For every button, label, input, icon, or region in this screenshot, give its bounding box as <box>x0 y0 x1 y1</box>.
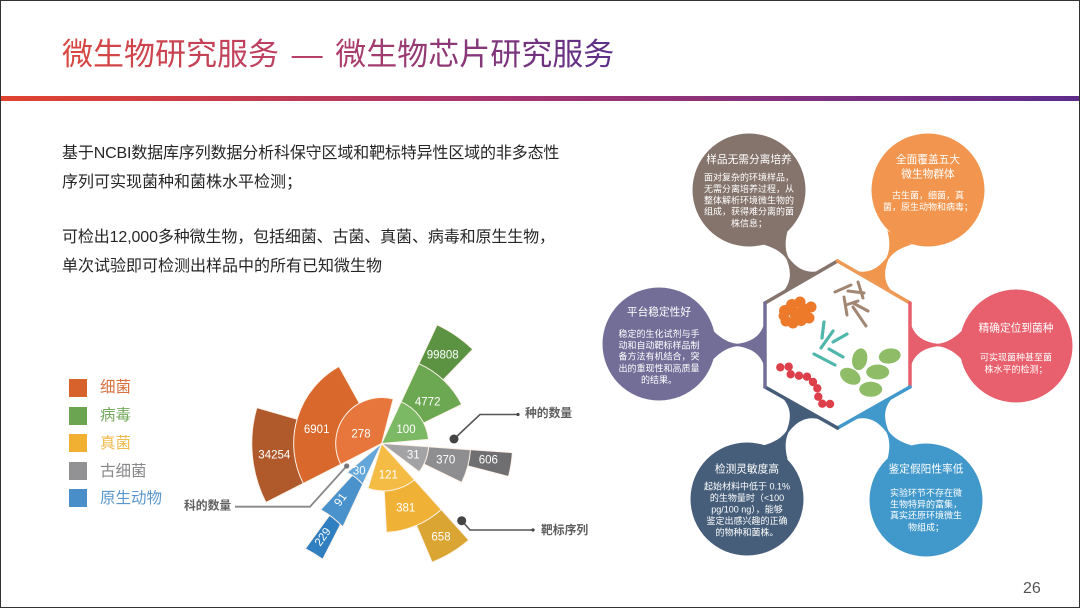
sector group: virus <box>382 325 473 444</box>
bubble: sensitivity: pg/100 ng），能够 <box>711 503 783 514</box>
chart values: 121 <box>379 470 398 482</box>
chart values <box>258 350 498 549</box>
chart values: 370 <box>436 455 455 467</box>
callout: target sequences: 靶标序列 <box>541 523 588 537</box>
chart values: 4772 <box>415 396 440 408</box>
bubble: no culture needed: 整体解析环境微生物的 <box>704 194 794 205</box>
bubble: sensitivity: 的生物量时（<100 <box>710 492 784 503</box>
callout: target sequences <box>457 516 588 537</box>
chart values: 606 <box>479 455 498 467</box>
callout: species count <box>450 406 572 444</box>
chart values: 91 <box>332 491 350 509</box>
bubble: platform stability: 的结果。 <box>641 374 677 385</box>
bubble: low false positives: 实验环节不存在微 <box>890 487 962 498</box>
text block: intro paragraph: 可检出12,000多种微生物，包括细菌、古菌、真菌、病毒和原生生物， <box>62 229 555 246</box>
chart values: 381 <box>396 502 415 514</box>
polar chart <box>252 325 512 562</box>
callout: family count <box>184 463 349 513</box>
bubble: platform stability: 动和自动靶标样品制 <box>618 339 700 350</box>
chart values: 99808 <box>427 350 459 362</box>
bubble: five microbial groups: 古生菌，细菌，真 <box>892 190 964 201</box>
chart values: 229 <box>313 526 334 549</box>
callout: species count: 种的数量 <box>525 406 572 420</box>
bubble: platform stability: 出的重现性和高质量 <box>618 363 700 374</box>
sector group: fungi <box>368 444 469 562</box>
chart values: 278 <box>351 428 371 440</box>
bubble: sensitivity <box>690 442 804 556</box>
bubble: low false positives <box>870 444 982 556</box>
icon: teal rods <box>814 322 847 365</box>
text block: intro paragraph: 单次试验即可检测出样品中的所有已知微生物 <box>62 258 382 275</box>
bubble: platform stability <box>602 288 716 400</box>
bubble: strain level: 精确定位到菌种 <box>979 321 1054 334</box>
hexagon <box>765 261 910 428</box>
legend: 细菌 <box>100 379 131 396</box>
text block: intro paragraph <box>62 144 559 275</box>
chart values: 6901 <box>304 424 329 436</box>
bubble: no culture needed: 无需分离培养过程，从 <box>704 183 794 194</box>
bubble: sensitivity: 检测灵敏度高 <box>715 462 779 475</box>
chart values: 30 <box>353 465 366 477</box>
bubble: no culture needed: 面对复杂的环境样品， <box>704 172 794 183</box>
legend: 原生动物 <box>100 490 162 507</box>
icon: red chain <box>776 362 834 408</box>
callout: family count: 科的数量 <box>184 499 231 513</box>
bubble: low false positives: 生物特异的富集， <box>890 498 962 509</box>
sector group: bacteria <box>252 366 393 502</box>
chart values: 100 <box>396 424 416 436</box>
legend: 古细菌 <box>100 463 147 480</box>
bubble: five microbial groups: 菌，原生动物和病毒； <box>883 201 973 212</box>
text block: intro paragraph: 基于NCBI数据库序列数据分析科保守区域和靶标特异性区域的非多态性 <box>62 145 559 162</box>
icon: brown rods <box>835 282 868 326</box>
text block: intro paragraph: 序列可实现菌种和菌株水平检测； <box>62 174 302 191</box>
chart values: 31 <box>407 450 420 462</box>
bubble: no culture needed: 样品无需分离培养 <box>706 153 792 166</box>
bubble: no culture needed: 组成，获得难分离的菌 <box>704 206 794 217</box>
bubble: low false positives: 真实还原环境微生 <box>890 510 962 521</box>
bubble: sensitivity: 的物种和菌株。 <box>715 526 779 537</box>
sector group: protozoa <box>305 444 382 559</box>
bubble: five microbial groups: 微生物群体 <box>901 167 955 180</box>
sector group: archaea <box>382 444 512 482</box>
legend <box>69 378 162 507</box>
bubble: strain level: 株水平的检测； <box>984 363 1048 374</box>
bubble: strain level <box>960 290 1072 402</box>
chart values: 34254 <box>258 449 291 461</box>
hexagon connectors <box>714 223 962 467</box>
legend: 真菌 <box>100 435 131 452</box>
bubble: sensitivity: 起始材料中低于 0.1% <box>704 481 790 492</box>
icon: orange cocci cluster <box>778 296 816 328</box>
page number: 26 <box>1023 580 1041 597</box>
bubble: low false positives: 物组成； <box>908 521 944 532</box>
title: 微生物研究服务 — 微生物芯片研究服务 <box>62 37 614 72</box>
bubble: platform stability: 平台稳定性好 <box>627 306 691 319</box>
gradient header bar <box>1 96 1079 101</box>
bubble: platform stability: 备方法有机结合，突 <box>618 351 700 362</box>
bubble: platform stability: 稳定的生化试剂与手 <box>618 328 700 339</box>
chart values: 658 <box>431 531 451 543</box>
bubble: five microbial groups: 全面覆盖五大 <box>896 153 960 166</box>
bubble: no culture needed <box>692 134 806 246</box>
legend: 病毒 <box>100 407 131 424</box>
bubble: no culture needed: 株信息； <box>731 217 767 228</box>
bubble: strain level: 可实现菌种甚至菌 <box>980 351 1052 362</box>
bubble: five microbial groups <box>872 134 984 246</box>
bubble: low false positives: 鉴定假阳性率低 <box>889 462 964 475</box>
icon: green ovals <box>837 347 902 397</box>
bubble: sensitivity: 鉴定出感兴趣的正确 <box>706 515 788 526</box>
